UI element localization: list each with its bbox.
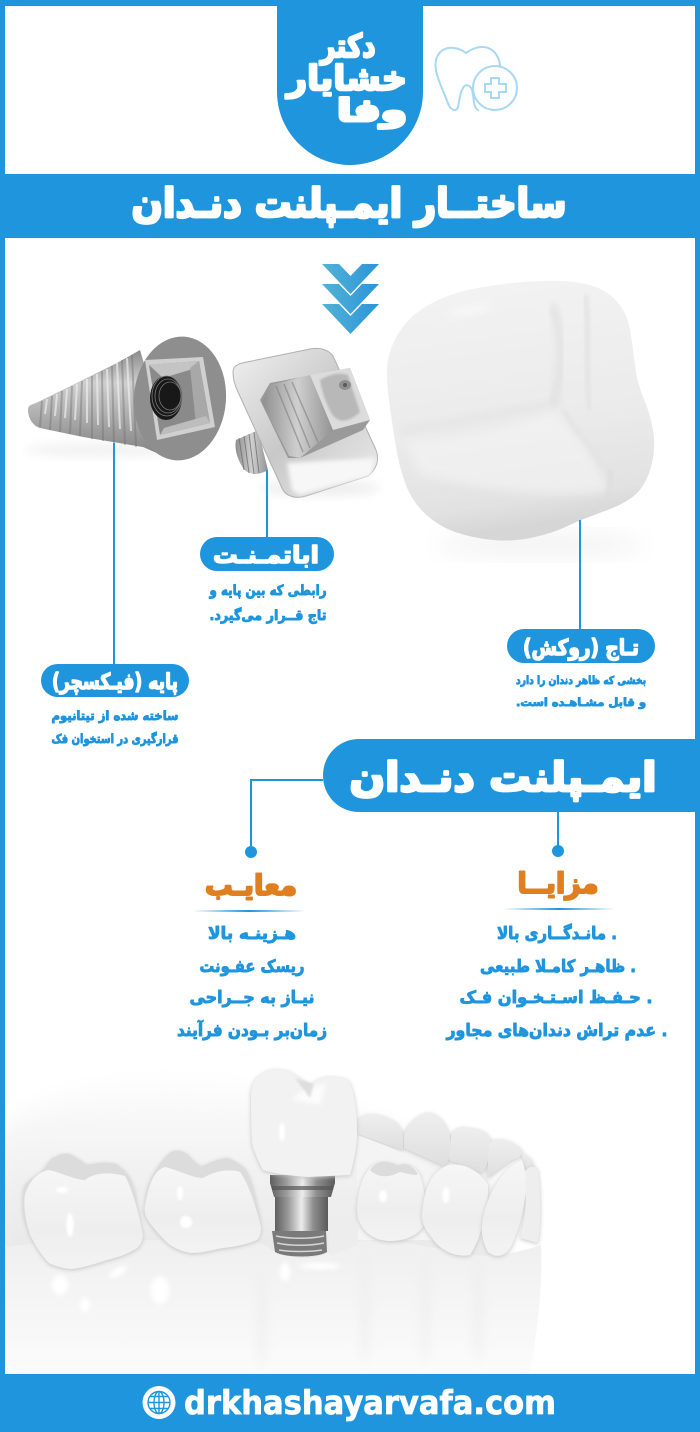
icon: tooth with plus (436, 47, 517, 110)
list: disadvantages: نیـاز به جــراحی (190, 988, 314, 1008)
label: abutment: اباتمـنـت (213, 541, 319, 569)
crown leader line (579, 520, 581, 630)
text: abutment description: تاج قــرار می‌گیرد. (210, 607, 326, 624)
text: fixture description: ساخته شده از تیتانیوم (52, 708, 178, 724)
fixture leader line (113, 443, 115, 664)
list: disadvantages: زمان‌بر بـودن فرآیند (177, 1019, 327, 1041)
label: crown (507, 629, 655, 663)
label: fixture (41, 664, 189, 697)
list: disadvantages: ریسک عفـونت (200, 957, 304, 977)
footer band (0, 1374, 700, 1432)
list: disadvantages: هـزینـه بالا (208, 924, 296, 944)
list: advantages: . عدم تراش دندان‌های مجاور (446, 1021, 668, 1041)
connector to disadvantages (245, 780, 323, 858)
logo text: vafa: وفا (337, 93, 407, 129)
molar left (23, 1154, 143, 1269)
back teeth (357, 1113, 536, 1178)
abutment leader line (266, 470, 268, 537)
molar second (144, 1151, 261, 1253)
divider: disadvantages (193, 910, 305, 912)
list: advantages (446, 923, 668, 1041)
premolar (357, 1162, 426, 1241)
image: jaw with dental implant (0, 1070, 541, 1380)
label: fixture: پایه (فیـکسچر) (52, 670, 178, 695)
logo text: doctor: دکتر (319, 27, 376, 65)
canine lateral teeth (482, 1160, 540, 1256)
canine (422, 1164, 488, 1256)
soft background arch (5, 1125, 493, 1258)
list: advantages: . حـفـظ اسـتـخـوان فـک (460, 988, 652, 1008)
connector to advantages (552, 812, 564, 857)
inner floor (358, 1136, 430, 1240)
website: drkhashayarvafa.com (184, 1383, 556, 1422)
icon: globe (142, 1386, 176, 1419)
text: crown description: بخشی که ظاهر دندان را دارد (516, 674, 646, 687)
logo text: khashayar: خشایار (285, 59, 407, 99)
soft gum root shading (257, 1255, 483, 1370)
icon: triple down chevrons (322, 264, 379, 334)
text: abutment description (209, 583, 326, 624)
section banner: dental implant (323, 739, 696, 812)
text: abutment description: رابطی که بین پایه و (209, 583, 326, 599)
image: abutment (233, 348, 380, 497)
heading: disadvantages: معایـب (205, 869, 297, 902)
text: fixture description: قرارگیری در استخوان فک (52, 731, 178, 746)
metal implant post (270, 1175, 335, 1256)
list: disadvantages (177, 924, 327, 1041)
image: implant fixture (25, 333, 230, 464)
text: crown description (516, 674, 646, 709)
divider: advantages (503, 908, 615, 910)
implant crown (251, 1070, 357, 1177)
title: ساختــار ایمـپلنت دنـدان (132, 181, 566, 227)
text: crown description: و قابل مشـاهـده است. (516, 696, 646, 709)
heading: advantages: مزایــا (518, 867, 598, 900)
list: advantages: . ظاهـر کامـلا طبیعی (480, 957, 636, 977)
image: dental crown (387, 281, 654, 555)
section banner: dental implant: ایمـپلنت دنـدان (350, 755, 656, 801)
list: advantages: . مانـدگــاری بالا (497, 923, 617, 944)
title band (0, 174, 700, 238)
text: fixture description (52, 708, 178, 746)
logo badge (277, 6, 423, 165)
gum (5, 1245, 542, 1324)
label: crown: تـاج (روکش) (523, 636, 639, 661)
gum bump beside implant (328, 1210, 358, 1255)
label: abutment (200, 537, 334, 571)
